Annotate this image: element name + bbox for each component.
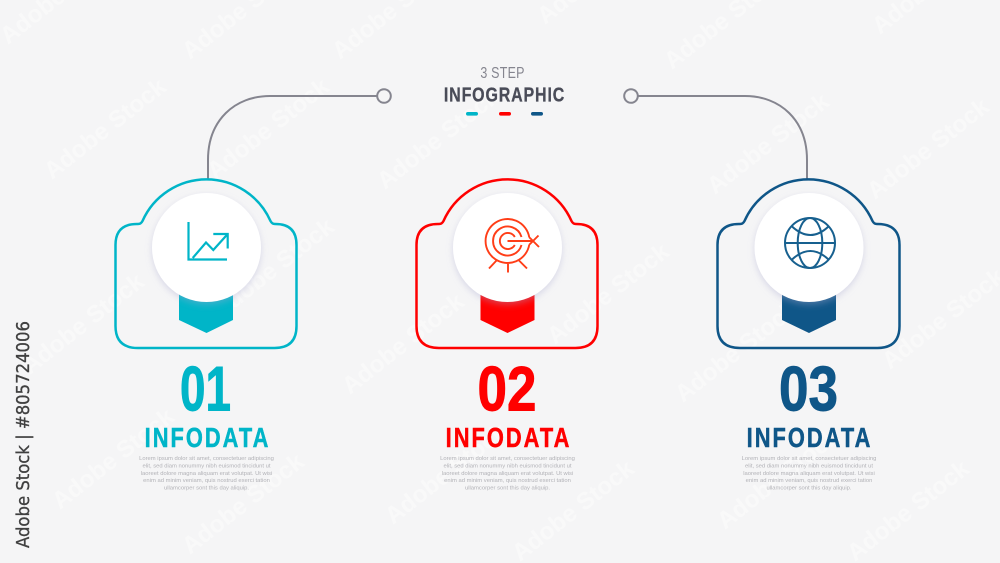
watermark pattern: Adobe Stock: [862, 93, 995, 205]
watermark pattern: Adobe Stock: [702, 88, 835, 200]
text block 03: enim ad minim veniam, quis nostrud exerci tation: [746, 478, 872, 484]
number 01: 01: [180, 354, 231, 424]
right connector: [624, 89, 807, 180]
text block 03: ullamcorper sont this day aliquip.: [766, 486, 852, 492]
icon: target with arrow: [486, 219, 539, 272]
card outline 02: [416, 179, 598, 348]
label 03: INFODATA: [747, 422, 872, 454]
text block 01: laoreet dolore magna aliquam erat volutpat. Ut wisi: [141, 471, 272, 477]
label 02: INFODATA: [446, 422, 571, 454]
title: [444, 65, 565, 106]
text block 02: enim ad minim veniam, quis nostrud exerci tation: [444, 478, 571, 484]
watermark pattern: Adobe Stock: [670, 296, 803, 408]
card outline 03: [718, 179, 900, 348]
watermark pattern: Adobe Stock: [207, 213, 340, 325]
text block 03: [742, 456, 876, 492]
panel: step 03: [718, 179, 900, 492]
title: 3 STEP: [480, 65, 525, 82]
text block 01: ullamcorper sont this day aliquip.: [164, 486, 249, 492]
panel: step 01: [116, 179, 296, 492]
text block 03: laoreet dolore magna aliquam erat volutpat. Ut wisi: [743, 471, 875, 477]
text block 01: Lorem ipsum dolor sit amet, consectetuer adipiscing: [139, 456, 274, 462]
text block 01: enim ad minim veniam, quis nostrud exerci tation: [143, 478, 270, 484]
circle 02: [453, 193, 562, 302]
card outline 01: [116, 179, 296, 348]
text block 02: laoreet dolore magna aliquam erat volutpat. Ut wisi: [442, 471, 573, 477]
text block 01: elit, sed diam nonummy nibh euismod tincidunt ut: [143, 463, 271, 469]
watermark pattern: Adobe Stock: [177, 448, 310, 560]
number 02: 02: [478, 354, 536, 424]
circle 03: [754, 193, 864, 302]
circle 01: [152, 193, 261, 302]
stock id side text: Adobe Stock | #805724006: [14, 321, 34, 548]
label 01: INFODATA: [145, 422, 270, 454]
ribbon 03: [782, 290, 836, 333]
watermark pattern: Adobe Stock: [712, 423, 845, 535]
watermark pattern: Adobe Stock: [380, 418, 513, 530]
ribbon 02: [480, 290, 534, 333]
watermark pattern: Adobe Stock: [337, 288, 470, 400]
text block 03: elit, sed diam nonummy nibh euismod tincidunt ut: [745, 463, 873, 469]
text block 02: elit, sed diam nonummy nibh euismod tincidunt ut: [444, 463, 572, 469]
number 03: 03: [779, 354, 838, 424]
watermark pattern: Adobe Stock: [202, 73, 335, 185]
ribbon 01: [179, 290, 233, 333]
watermark pattern: Adobe Stock: [47, 403, 180, 515]
text block 03: Lorem ipsum dolor sit amet, consectetuer adipiscing: [742, 456, 876, 462]
icon: rising chart: [188, 222, 228, 260]
watermark pattern: Adobe Stock: [17, 268, 150, 380]
panel: step 02: [416, 179, 598, 492]
watermark pattern: Adobe Stock: [372, 83, 505, 195]
text block 01: [139, 456, 274, 492]
title: INFOGRAPHIC: [444, 84, 565, 106]
watermark pattern: Adobe Stock: [39, 73, 172, 185]
text block 02: Lorem ipsum dolor sit amet, consectetuer adipiscing: [440, 456, 575, 462]
icon: globe: [785, 218, 835, 268]
text block 02: ullamcorper sont this day aliquip.: [465, 486, 550, 492]
left connector: [208, 89, 391, 179]
colour dashes: [466, 112, 543, 116]
watermark pattern: Adobe Stock: [542, 238, 675, 350]
text block 02: [440, 456, 575, 492]
